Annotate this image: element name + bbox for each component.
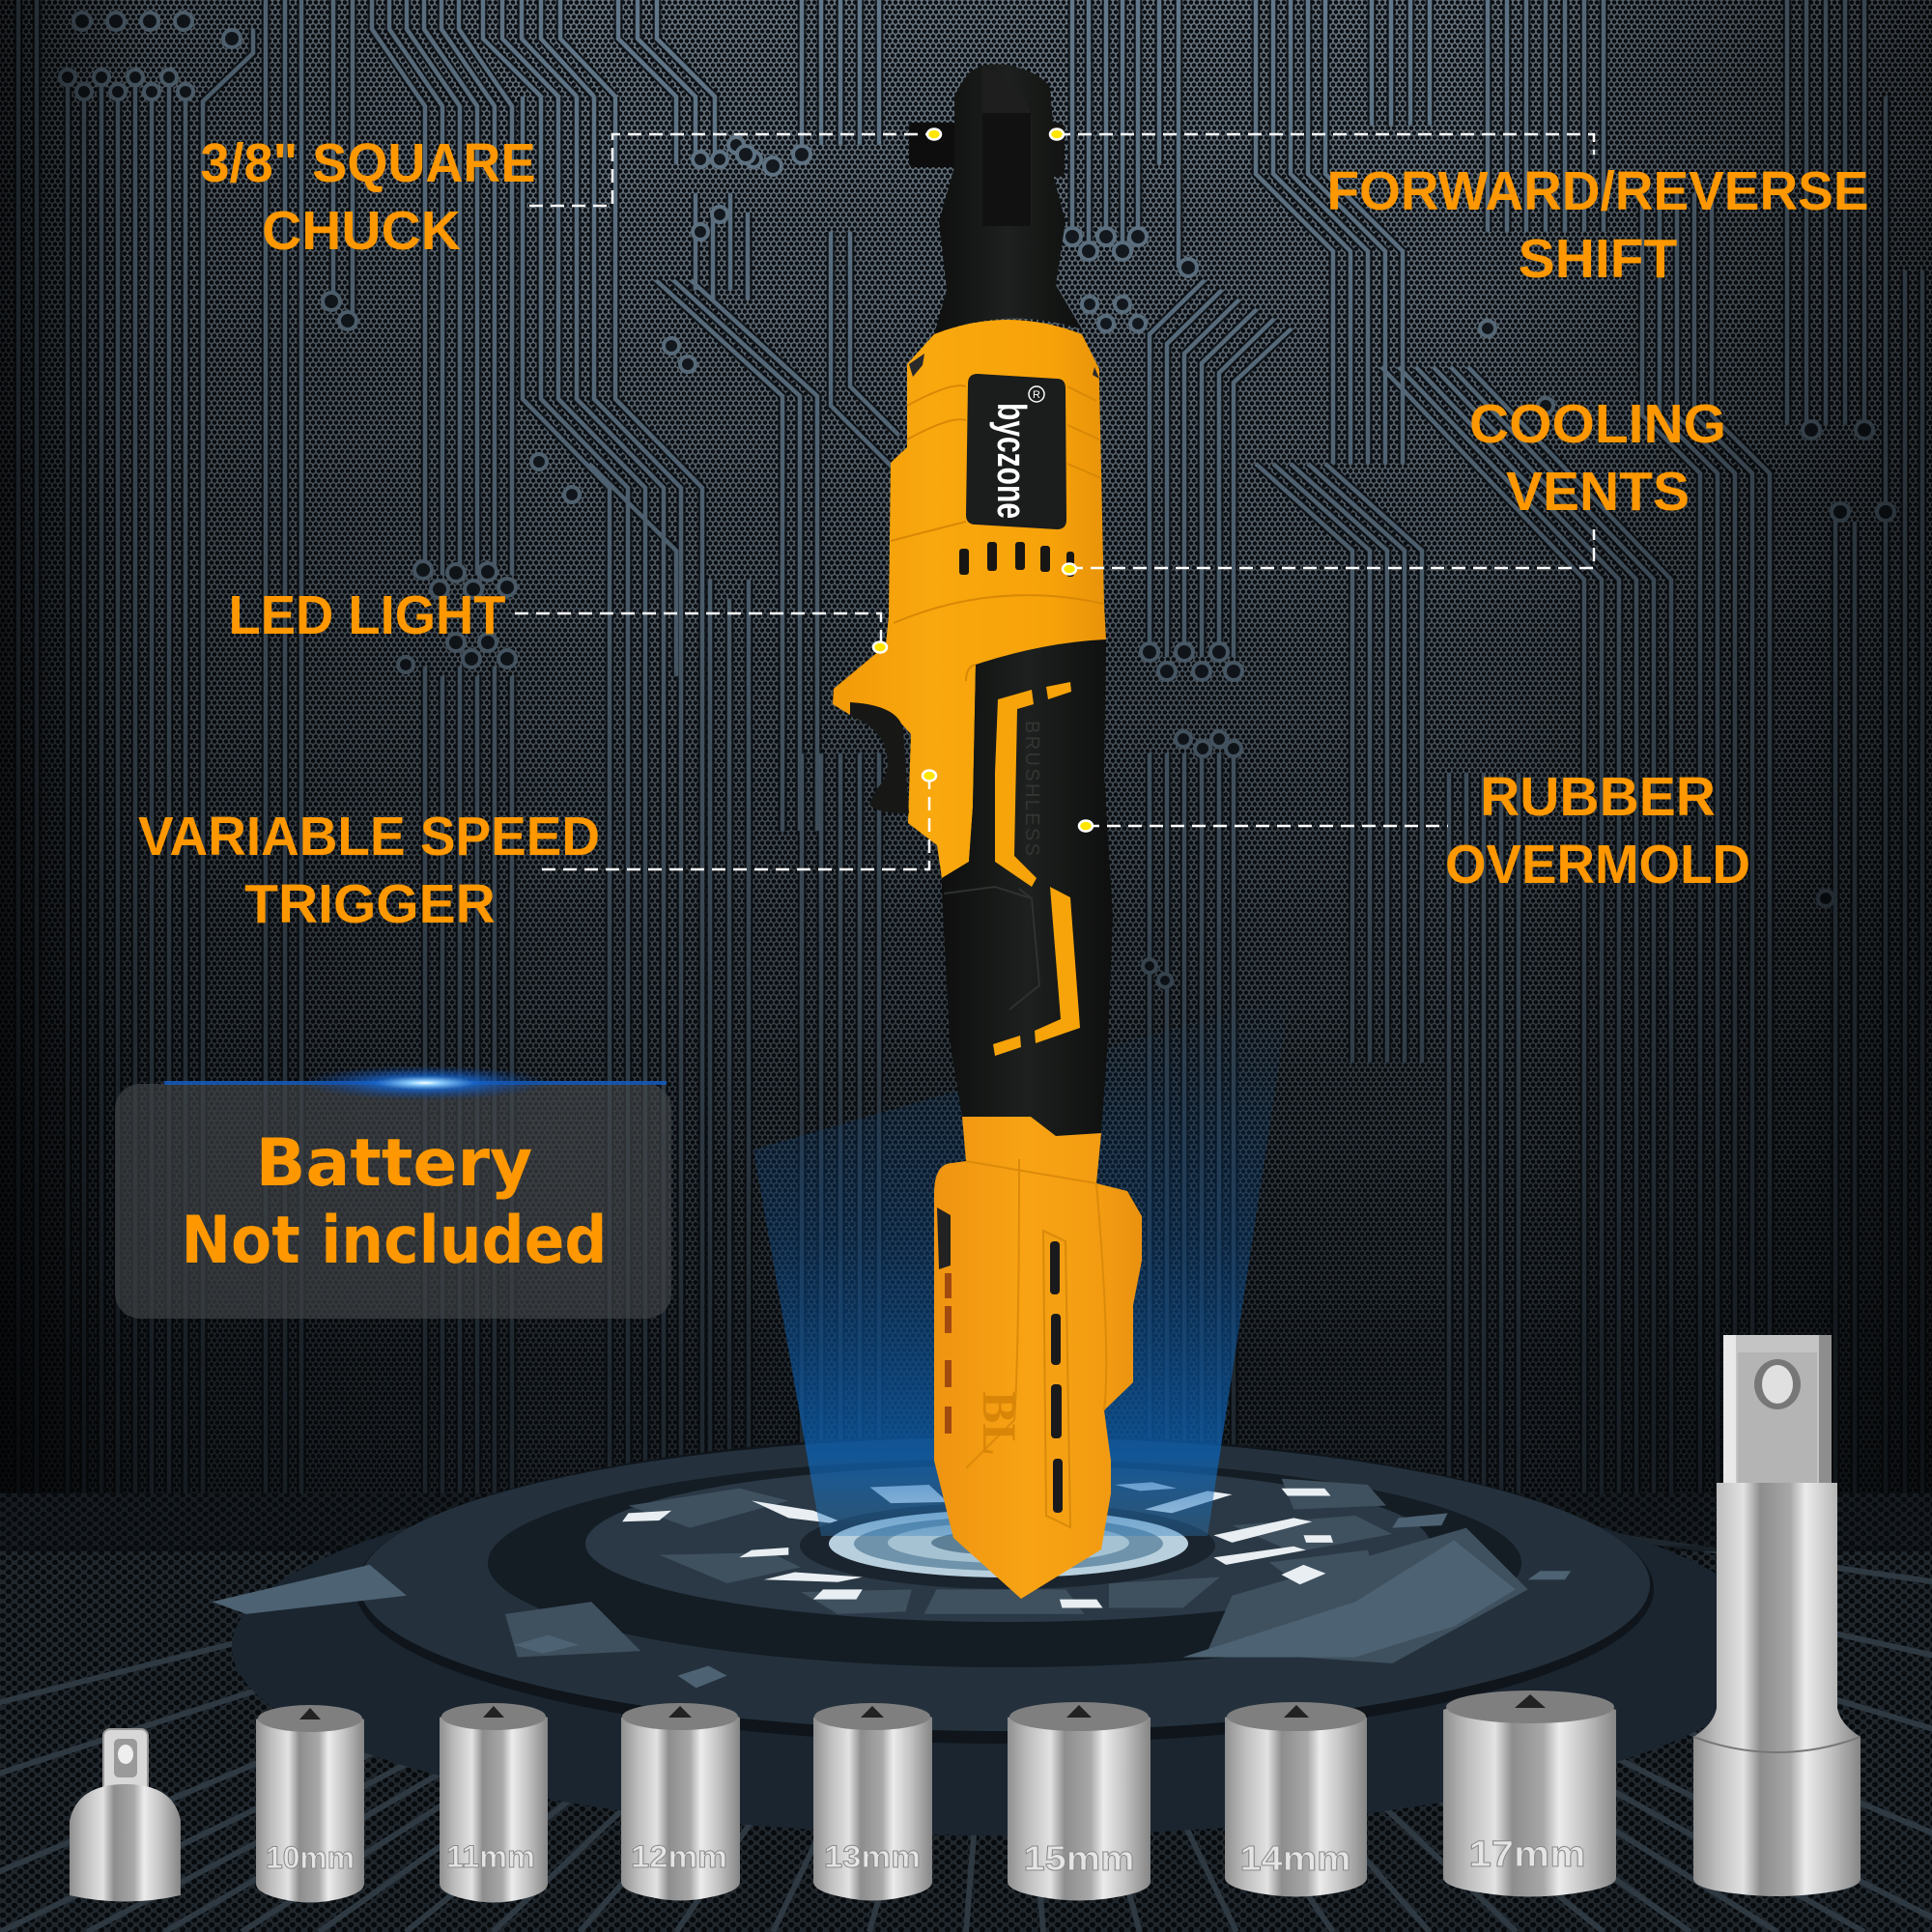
- socket set: [70, 1335, 1861, 1903]
- callout: rubber overmold: OVERMOLD: [1445, 834, 1750, 895]
- callout: variable speed trigger: [138, 771, 936, 935]
- callout: 3/8 square chuck: 3/8" SQUARE: [201, 132, 535, 194]
- icon: ratchet head: [909, 65, 1082, 334]
- cooling vent slots: [959, 542, 1074, 577]
- icon: socket adapter: [70, 1729, 181, 1901]
- callout: forward/reverse shift: SHIFT: [1519, 228, 1678, 290]
- socket 15mm: 15mm: [1024, 1838, 1134, 1878]
- callout: variable speed trigger: VARIABLE SPEED: [138, 806, 600, 867]
- socket 11mm: [440, 1703, 548, 1903]
- socket 11mm: 11mm: [446, 1839, 535, 1874]
- vent panel: [1043, 1231, 1070, 1527]
- socket 17mm: [1443, 1690, 1616, 1897]
- socket 12mm: 12mm: [631, 1839, 727, 1874]
- socket 14mm: 14mm: [1240, 1838, 1350, 1878]
- callout: rubber overmold: RUBBER: [1480, 766, 1716, 828]
- logo plate: R: [1033, 389, 1040, 401]
- floor with perspective traces: [0, 1449, 1932, 1932]
- callout: cooling vents: COOLING: [1469, 393, 1726, 455]
- contacts: [937, 1208, 952, 1434]
- socket 13mm: 13mm: [824, 1839, 921, 1874]
- icon: rubber overmold grip: [942, 639, 1113, 1136]
- socket 10mm: 10mm: [266, 1840, 355, 1875]
- logo plate: byczone: [989, 403, 1035, 519]
- callout: 3/8 square chuck: CHUCK: [262, 200, 461, 262]
- socket 10mm: [256, 1705, 364, 1903]
- callout: forward/reverse shift: [1050, 129, 1868, 290]
- battery note panel: [115, 1065, 671, 1319]
- platform: concentric hub disc: [212, 1435, 1777, 1835]
- ratchet tool: [833, 65, 1142, 1599]
- callout: 3/8 square chuck: [201, 129, 941, 262]
- blue light beam: [753, 995, 1290, 1536]
- blue glow accent: [164, 1065, 667, 1100]
- logo plate: [966, 374, 1066, 529]
- callout: rubber overmold: [1079, 766, 1750, 895]
- callout: cooling vents: VENTS: [1506, 461, 1690, 523]
- socket 15mm: [1008, 1702, 1151, 1901]
- icon: extension bar: [1693, 1335, 1861, 1896]
- socket 12mm: [621, 1703, 740, 1901]
- text: BL: BL: [973, 1391, 1027, 1456]
- icon: trigger: [850, 702, 909, 813]
- battery note panel: Not included: [182, 1203, 607, 1279]
- callout: LED light: LED LIGHT: [228, 584, 506, 646]
- socket 13mm: [813, 1703, 932, 1901]
- socket 14mm: [1225, 1702, 1367, 1897]
- icon: battery mount housing: [934, 1117, 1142, 1599]
- callout: forward/reverse shift: FORWARD/REVERSE: [1327, 160, 1868, 222]
- text: brushless: BRUSHLESS: [1021, 721, 1042, 856]
- callout: LED light: [228, 584, 887, 653]
- callout: variable speed trigger: TRIGGER: [244, 873, 496, 935]
- icon: yellow motor housing: [833, 320, 1106, 878]
- callout: cooling vents: [1063, 393, 1726, 574]
- socket 17mm: 17mm: [1468, 1834, 1586, 1875]
- battery note panel: Battery: [256, 1125, 532, 1202]
